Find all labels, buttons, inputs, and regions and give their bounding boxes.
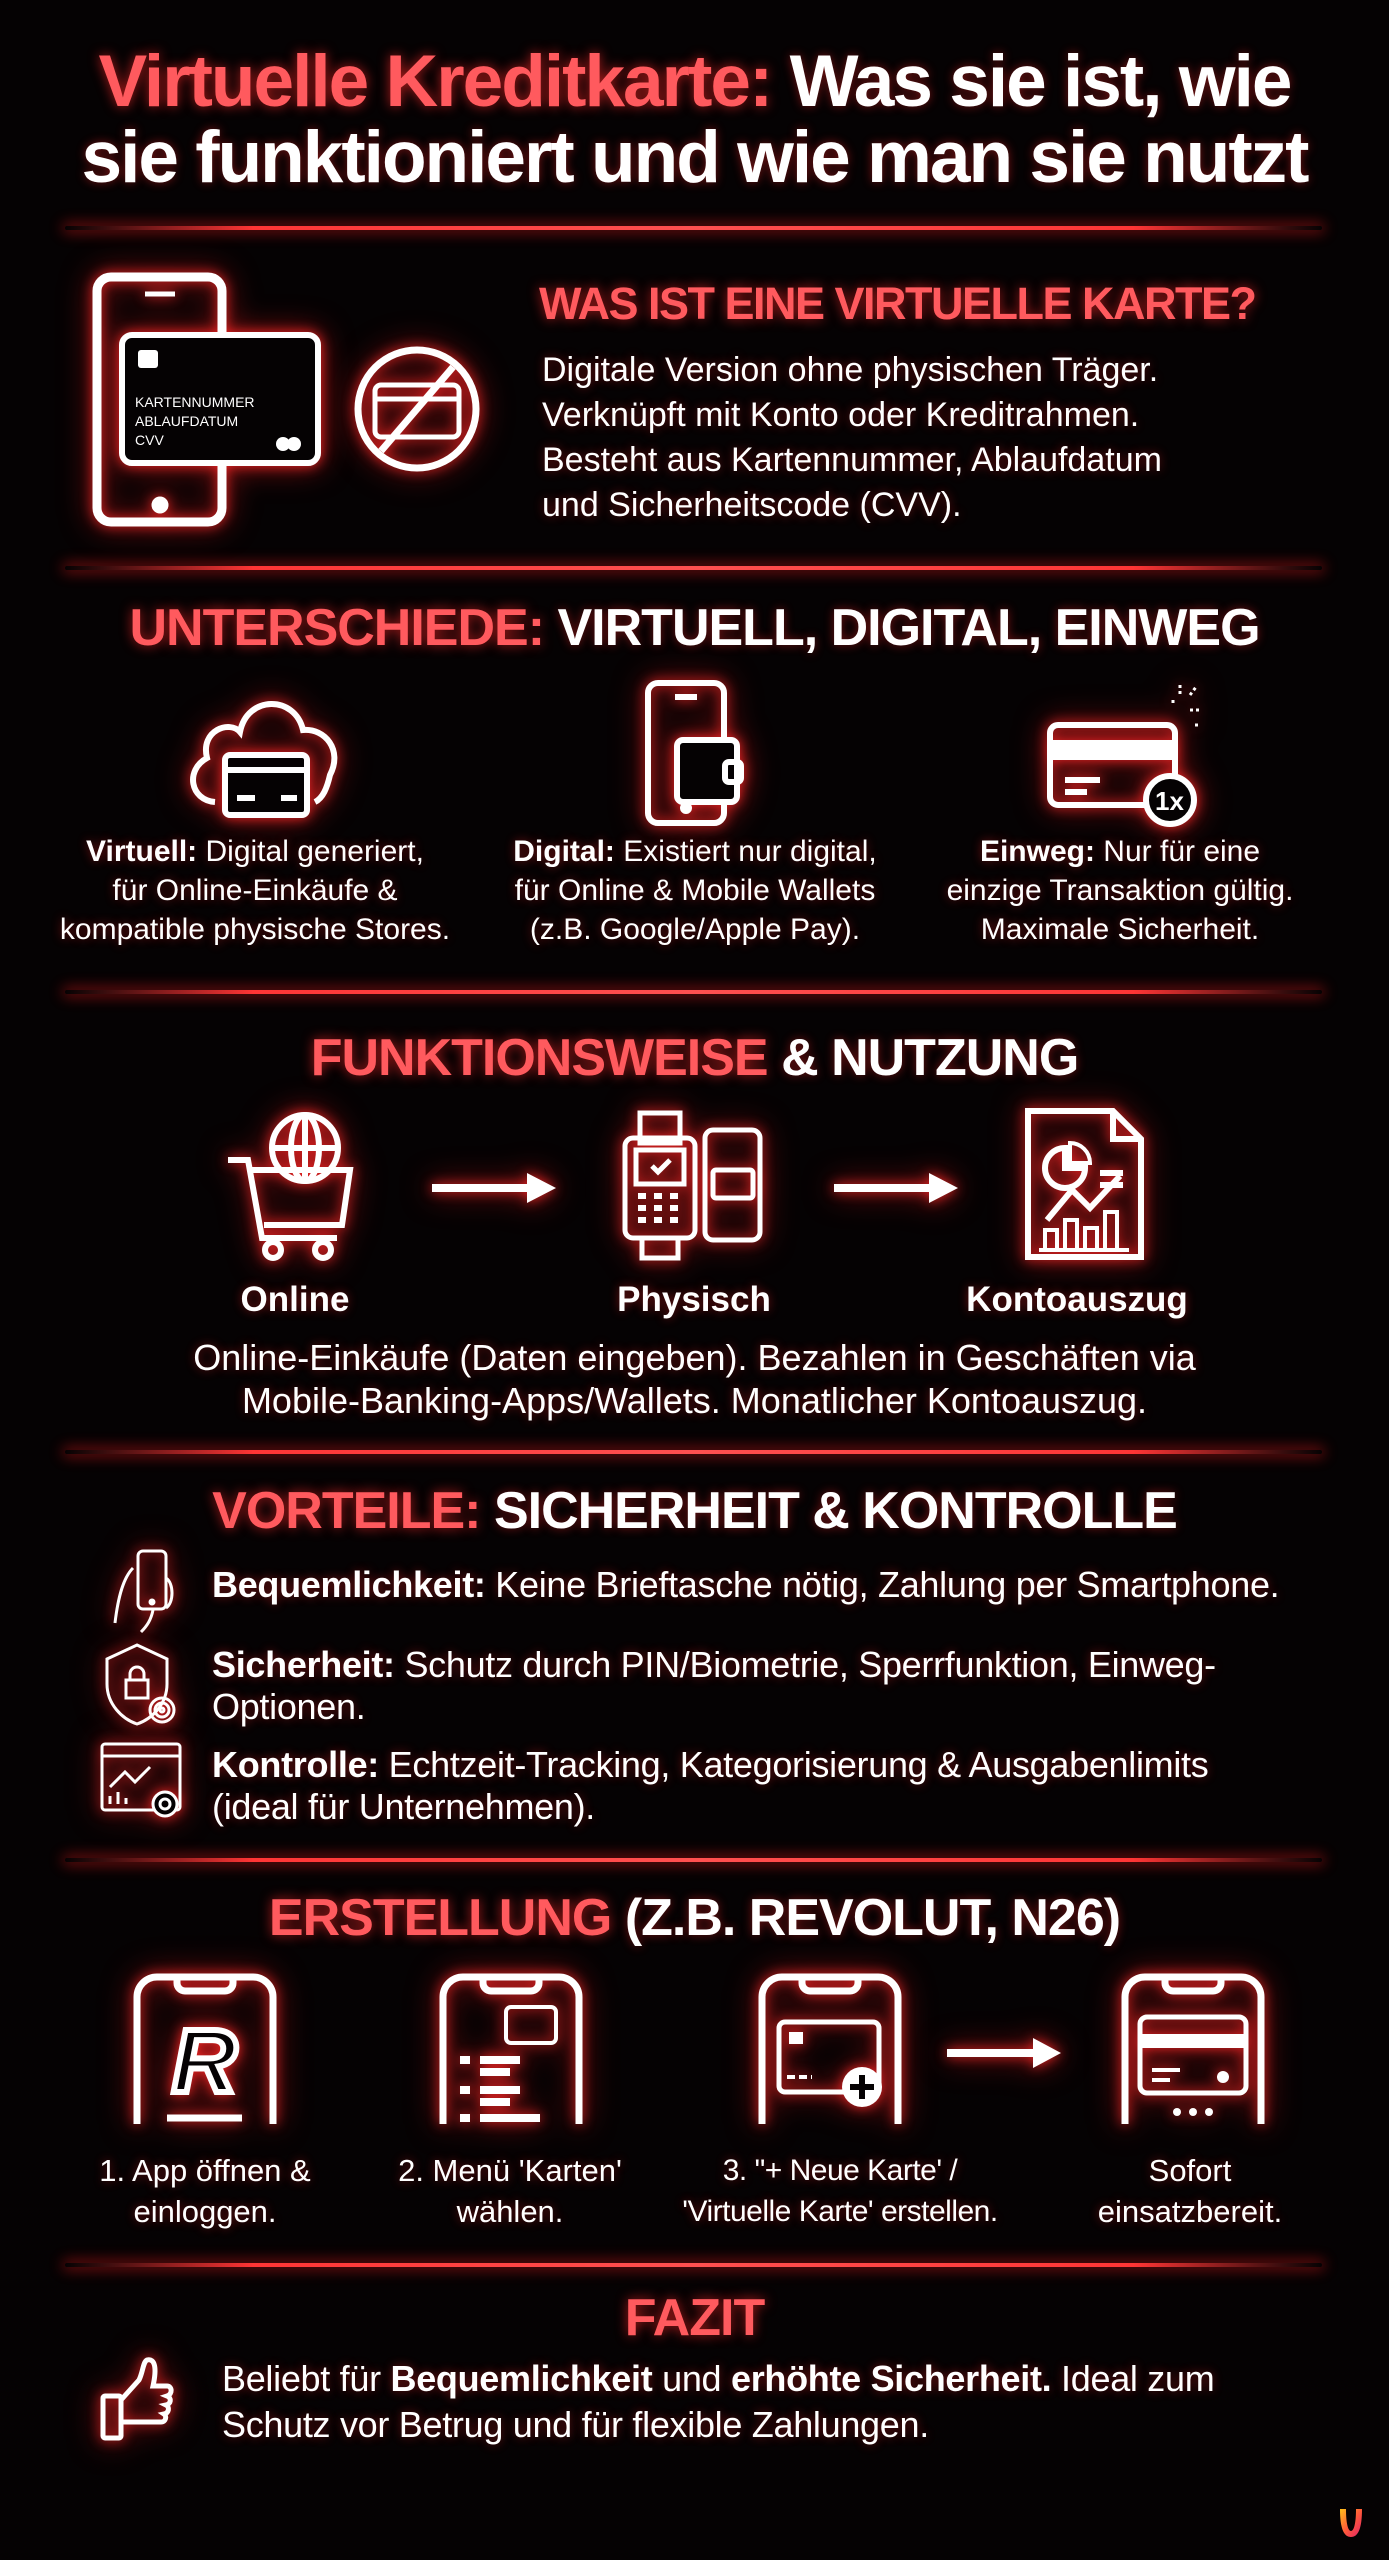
text: Sicherheit: Schutz durch PIN/Biometrie, Sperrfunktion, Einweg-: [212, 1644, 1216, 1685]
text: definition: Besteht aus Kartennummer, Ablaufdatum: [542, 441, 1162, 479]
label: kontoauszug: Kontoauszug: [966, 1280, 1188, 1319]
text: nutzung: [190, 1337, 1200, 1425]
arrow 1: [420, 1158, 566, 1218]
item: kontrolle: [83, 1725, 1212, 1836]
text: fazit: Beliebt für Bequemlichkeit und erhöhte Sicherheit. Ideal zum: [222, 2358, 1214, 2399]
text: virtuell: Virtuell: Digital generiert,: [86, 835, 424, 868]
label step 4: Sofort: [1149, 2153, 1231, 2188]
text: nutzung: Mobile-Banking-Apps/Wallets. Monatlicher Kontoauszug.: [242, 1380, 1147, 1421]
text: [208, 1744, 1212, 1828]
heading: vorteile: VORTEILE: SICHERHEIT & KONTROLLE: [212, 1482, 1177, 1540]
icon: phone with virtual card: [70, 250, 344, 548]
icon: statement: [1004, 1088, 1164, 1282]
text: fazit: [218, 2358, 1218, 2449]
text: (ideal für Unternehmen).: [212, 1786, 595, 1827]
icon: phone wallet: [624, 659, 764, 846]
text: Optionen.: [212, 1686, 365, 1727]
item: bequemlichkeit: [102, 1535, 1279, 1640]
text: virtuell: kompatible physische Stores.: [60, 913, 450, 946]
arrow 3: [935, 2023, 1072, 2083]
icon: no physical card: [336, 327, 500, 491]
arrow 2: [822, 1158, 968, 1218]
text: einweg: [943, 834, 1293, 946]
title: Virtuelle Kreditkarte: Was sie ist, wie: [99, 41, 1290, 122]
text: einweg: Einweg: Nur für eine: [980, 835, 1260, 868]
text: definition: und Sicherheitscode (CVV).: [542, 486, 962, 524]
icon: shield lock: [90, 1630, 192, 1740]
icon: phone with virtual card: CVV: [135, 432, 164, 448]
label step 1: 1. App öffnen &: [99, 2153, 311, 2188]
label: physisch: Physisch: [617, 1280, 771, 1319]
text: definition: [538, 351, 1166, 524]
title: [80, 41, 1313, 198]
label step 3: [681, 2154, 998, 2228]
icon: single use card: [1026, 680, 1216, 846]
step 1: app: R: [172, 2012, 237, 2112]
text: digital: für Online & Mobile Wallets: [515, 874, 875, 907]
label step 3: 'Virtuelle Karte' erstellen.: [682, 2195, 998, 2228]
icon: terminal and phone: [602, 1091, 784, 1280]
icon: hand phone: [102, 1535, 190, 1640]
label step 1: [99, 2153, 313, 2232]
step 3: new card: [738, 1952, 922, 2136]
heading: fazit: FAZIT: [625, 2289, 764, 2347]
label step 3: 3. "+ Neue Karte' /: [723, 2154, 957, 2187]
step 4: ready: [1100, 1952, 1286, 2136]
label step 1: einloggen.: [133, 2194, 277, 2229]
title: sie funktioniert und wie man sie nutzt: [82, 117, 1307, 198]
icon: thumbs up: [81, 2344, 192, 2458]
text: nutzung: Online-Einkäufe (Daten eingeben). Bezahlen in Geschäften via: [193, 1337, 1196, 1378]
logo: [1337, 2505, 1365, 2539]
text: digital: (z.B. Google/Apple Pay).: [530, 913, 860, 946]
text: [208, 1644, 1216, 1729]
icon: phone with virtual card: KARTENNUMMER: [135, 394, 255, 410]
label step 2: 2. Menü 'Karten': [398, 2153, 622, 2188]
step 2: menu: [418, 1952, 604, 2144]
icon: single use card: 1x: [1155, 786, 1184, 816]
text: virtuell: für Online-Einkäufe &: [112, 874, 398, 907]
text: einweg: Maximale Sicherheit.: [981, 913, 1259, 946]
text: digital: Digital: Existiert nur digital,: [513, 835, 877, 868]
step 1: app: [112, 1952, 298, 2142]
label step 2: wählen.: [457, 2194, 563, 2229]
text: Bequemlichkeit: Keine Brieftasche nötig, Zahlung per Smartphone.: [212, 1564, 1279, 1605]
icon: cart globe: [217, 1092, 371, 1276]
item: sicherheit: [90, 1630, 1216, 1740]
label step 2: [396, 2153, 622, 2229]
label step 4: [1094, 2153, 1282, 2229]
label: online: Online: [241, 1280, 349, 1319]
text: virtuell: [56, 835, 450, 948]
heading: erstellung: ERSTELLUNG (Z.B. REVOLUT, N26): [269, 1889, 1120, 1947]
label step 4: einsatzbereit.: [1098, 2194, 1282, 2229]
text: Kontrolle: Echtzeit-Tracking, Kategorisierung & Ausgabenlimits: [212, 1744, 1208, 1785]
heading: was ist eine virtuelle karte: WAS IST EINE VIRTUELLE KARTE?: [539, 278, 1256, 329]
text: digital: [509, 834, 878, 949]
icon: dashboard gear: [83, 1725, 200, 1836]
heading: unterschiede: UNTERSCHIEDE: VIRTUELL, DIGITAL, EINWEG: [129, 599, 1260, 657]
text: fazit: Schutz vor Betrug und für flexible Zahlungen.: [222, 2404, 929, 2445]
icon: cloud card: [172, 683, 356, 840]
heading: funktionsweise: FUNKTIONSWEISE & NUTZUNG: [311, 1029, 1078, 1087]
text: einweg: einzige Transaktion gültig.: [947, 874, 1293, 907]
icon: phone with virtual card: ABLAUFDATUM: [135, 413, 238, 429]
text: definition: Verknüpft mit Konto oder Kreditrahmen.: [542, 396, 1139, 434]
text: definition: Digitale Version ohne physischen Träger.: [542, 351, 1158, 389]
